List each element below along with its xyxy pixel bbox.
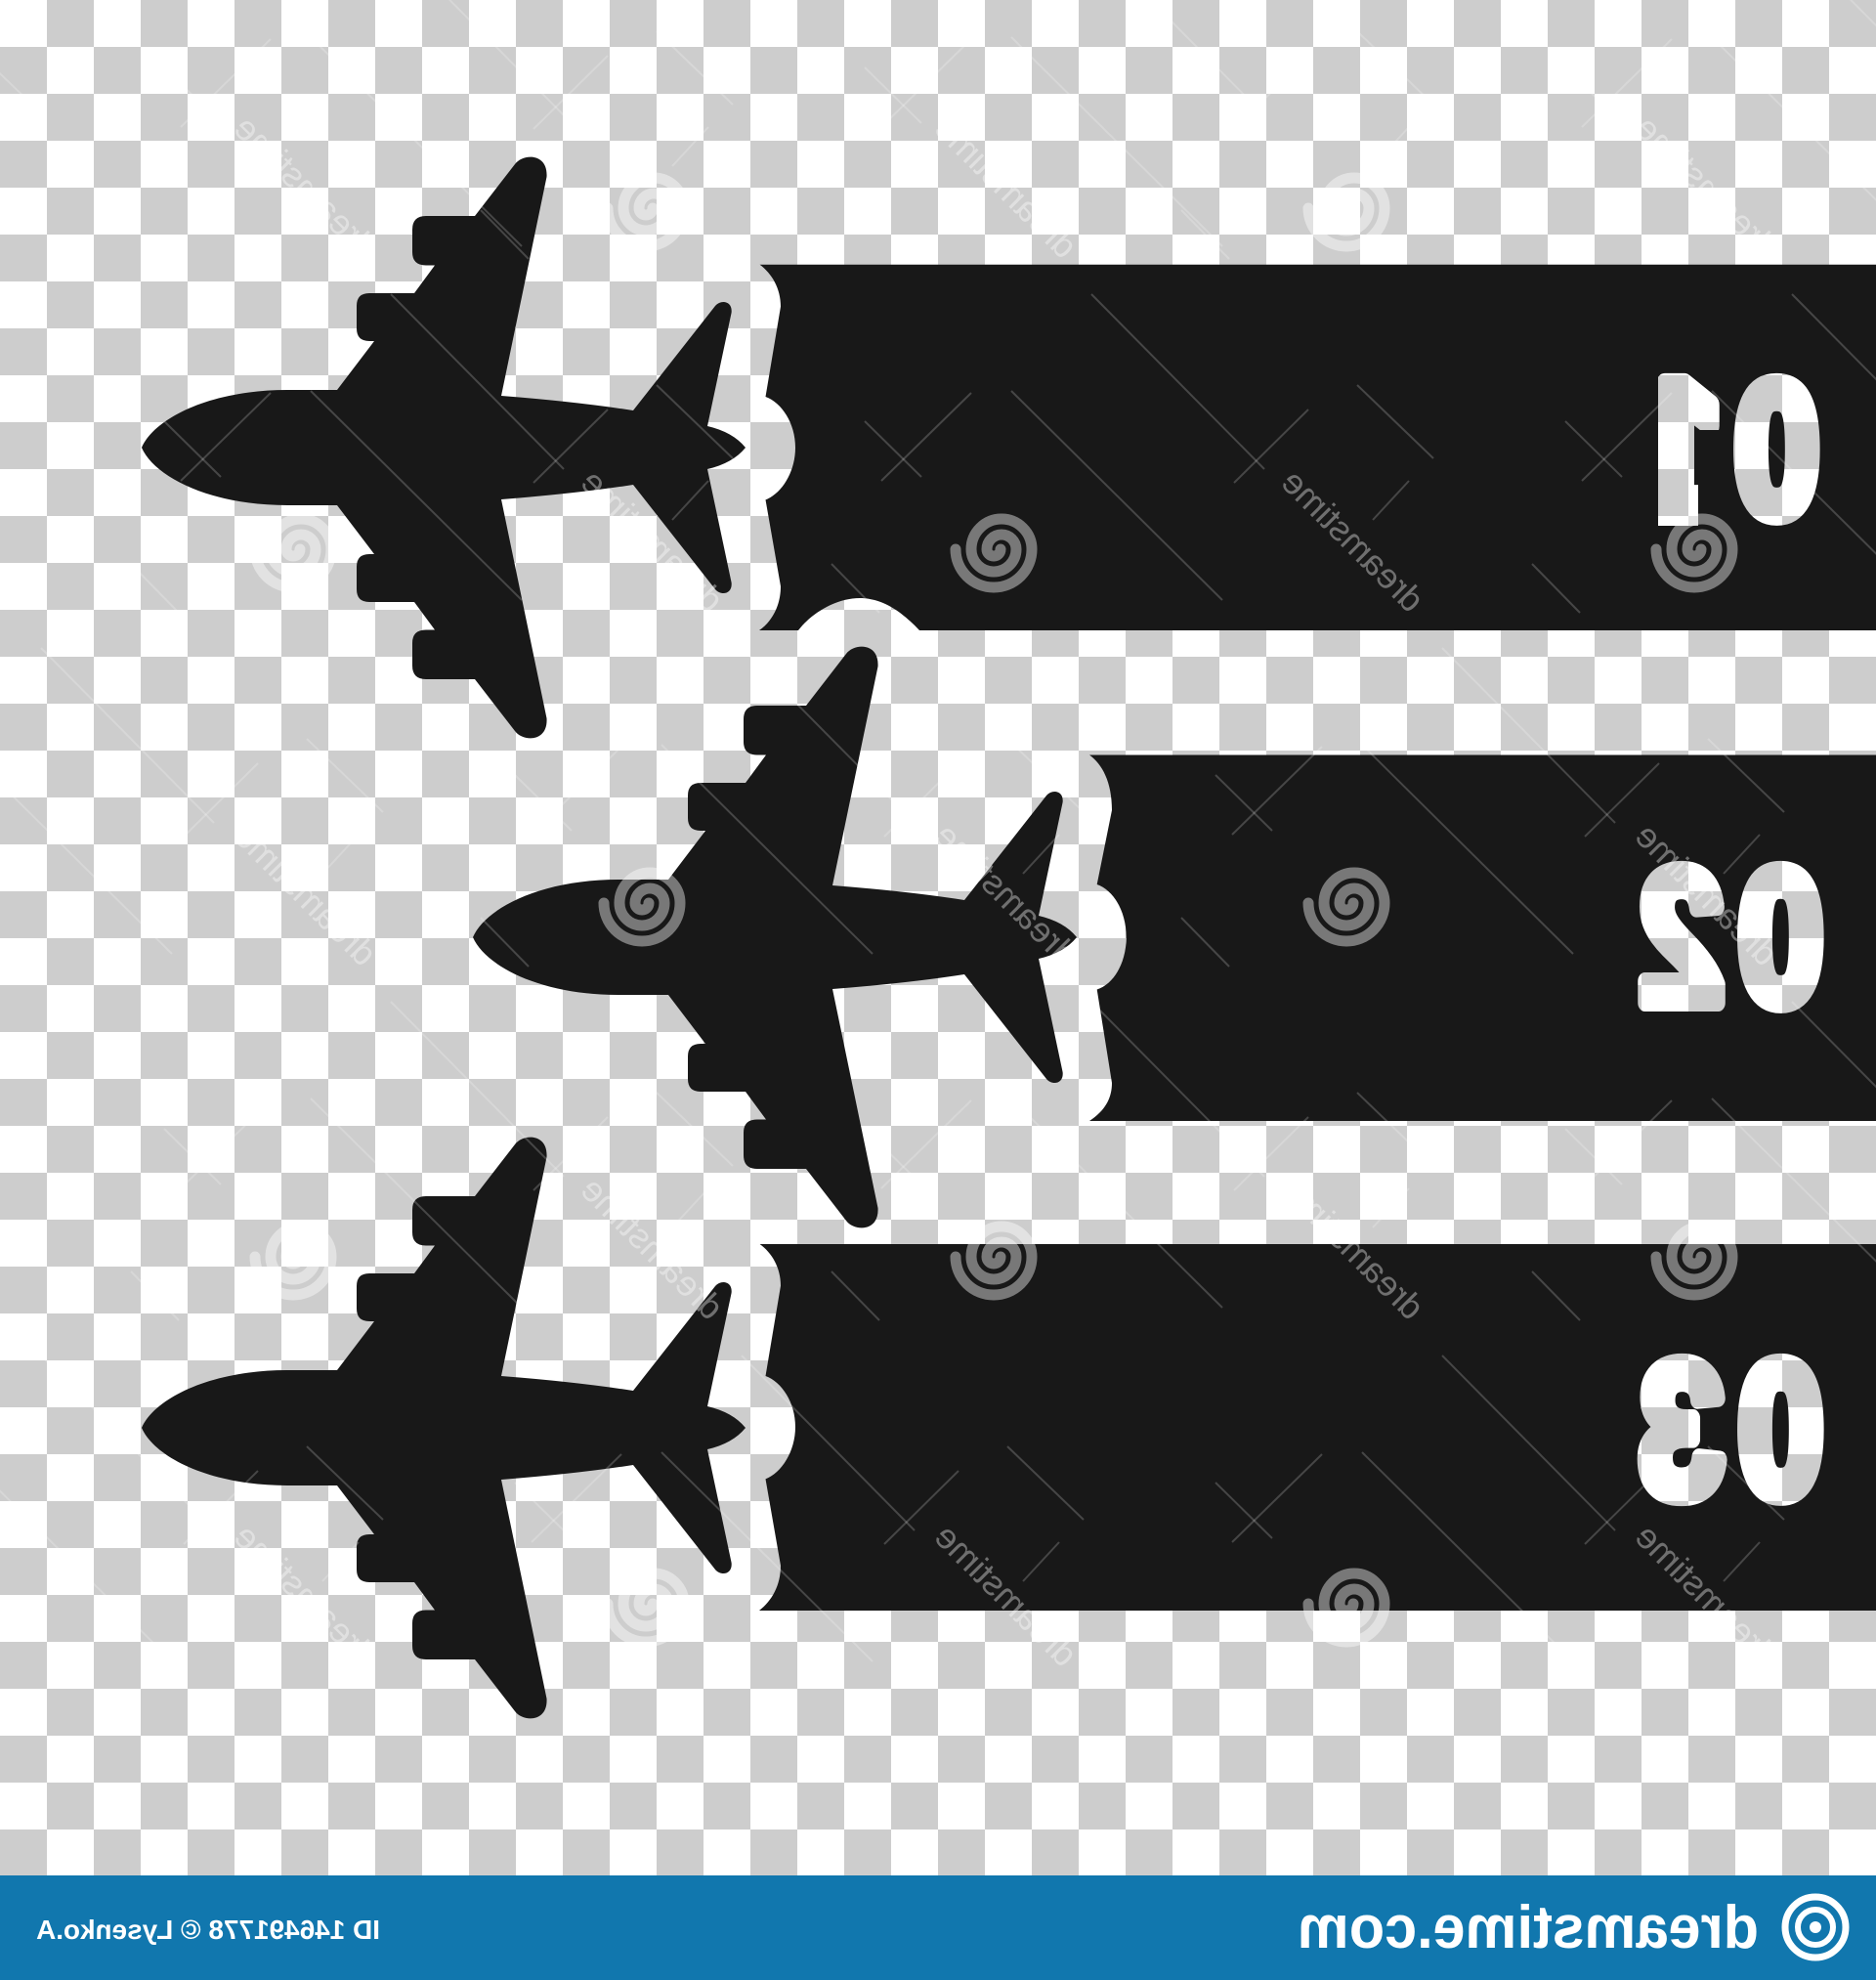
watermark spirals bbox=[255, 178, 1732, 1642]
footer brand name (mirrored): dreamstime.com bbox=[1298, 1894, 1759, 1961]
footer band bbox=[0, 1875, 1876, 1980]
watermark text: dreamstime bbox=[1628, 108, 1786, 266]
banner 1 bbox=[759, 265, 1876, 630]
footer credit text (mirrored): ID 146491778 © Lysenko.A bbox=[36, 1915, 380, 1945]
airplane 3 bbox=[142, 1138, 746, 1718]
watermark text: dreamstime bbox=[927, 108, 1086, 266]
number 03 (mirrored): 0 bbox=[1738, 1323, 1823, 1536]
watermark text: dreamstime bbox=[1274, 461, 1432, 620]
number 02 (mirrored): 0 bbox=[1738, 831, 1823, 1044]
watermark text: dreamstime bbox=[227, 1516, 385, 1674]
watermark text: dreamstime bbox=[927, 815, 1086, 973]
watermark text: dreamstime bbox=[927, 1516, 1086, 1674]
icon: footer spiral logo bbox=[1785, 1897, 1846, 1958]
watermark text bbox=[227, 108, 1786, 1674]
watermark text: dreamstime bbox=[574, 1169, 732, 1327]
banner 3 bbox=[759, 1244, 1876, 1611]
banner 2 bbox=[1089, 754, 1876, 1121]
watermark text: dreamstime bbox=[227, 815, 385, 973]
number 01 (mirrored): 0 bbox=[1734, 343, 1819, 556]
number 01 (mirrored) bbox=[1658, 373, 1820, 526]
watermark text: dreamstime bbox=[1274, 1169, 1432, 1327]
watermark text: dreamstime bbox=[574, 461, 732, 620]
number 02 (mirrored) bbox=[1639, 831, 1823, 1044]
watermark text: dreamstime bbox=[1628, 1516, 1786, 1674]
number 03 (mirrored): 3 bbox=[1639, 1323, 1724, 1536]
number 02 (mirrored): 2 bbox=[1639, 831, 1724, 1044]
airplane 1 bbox=[142, 157, 746, 738]
number 01 (mirrored): 1 bbox=[1637, 343, 1722, 556]
airplane 2 bbox=[473, 647, 1077, 1227]
watermark text: dreamstime bbox=[1628, 815, 1786, 973]
number 03 (mirrored) bbox=[1639, 1323, 1823, 1536]
watermark text: dreamstime bbox=[227, 108, 385, 266]
